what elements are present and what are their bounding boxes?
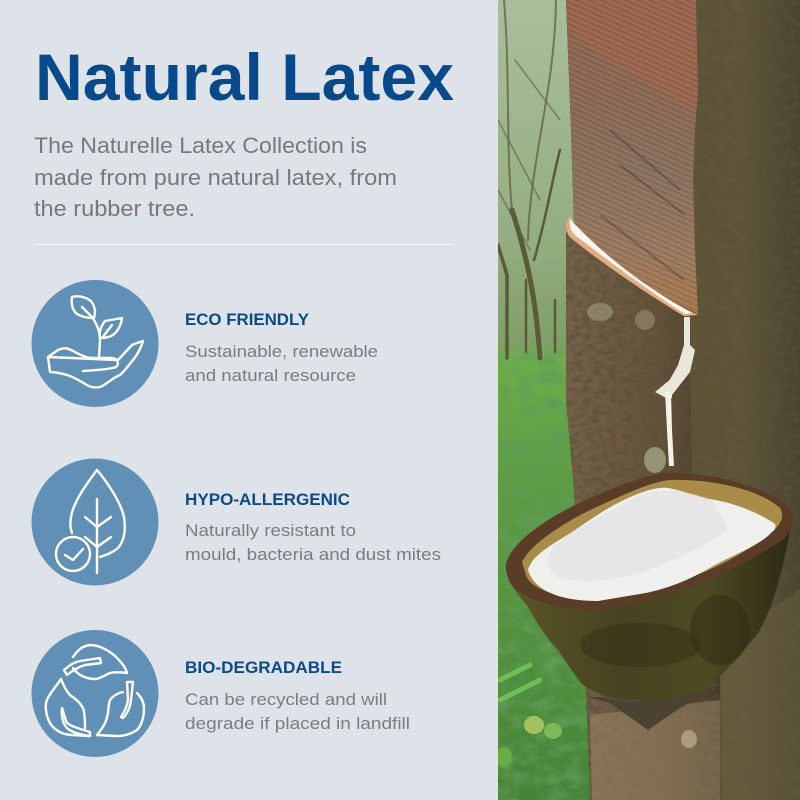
intro text — [34, 133, 397, 221]
description: and natural resource — [185, 366, 356, 385]
description — [185, 342, 378, 385]
heading: ECO FRIENDLY — [185, 310, 310, 329]
icon: leaf with check — [32, 458, 158, 586]
latex groove and drip — [566, 216, 698, 466]
feature: bio-degradable — [32, 630, 410, 757]
description: degrade if placed in landfill — [185, 714, 410, 733]
photo: rubber tree being tapped — [496, 0, 800, 800]
feature: eco friendly — [32, 280, 378, 407]
foreground foliage — [496, 665, 562, 767]
intro text: The Naturelle Latex Collection is — [34, 133, 367, 158]
feature: hypo-allergenic — [32, 458, 441, 586]
description: Can be recycled and will — [185, 690, 387, 709]
icon: plant in hand — [32, 280, 158, 407]
description — [185, 690, 410, 733]
collecting bowl — [506, 473, 793, 730]
intro text: made from pure natural latex, from — [34, 165, 397, 190]
description: Naturally resistant to — [185, 521, 356, 540]
description: Sustainable, renewable — [185, 342, 378, 361]
tapping panel — [566, 0, 700, 320]
icon: recycling leaves — [32, 630, 158, 757]
description — [185, 521, 441, 564]
heading: HYPO-ALLERGENIC — [185, 490, 350, 509]
tree trunk — [566, 0, 800, 800]
intro text: the rubber tree. — [34, 196, 195, 221]
forest background — [498, 0, 590, 800]
description: mould, bacteria and dust mites — [185, 545, 441, 564]
title: Natural Latex — [35, 40, 454, 114]
background panel — [0, 0, 498, 800]
heading: BIO-DEGRADABLE — [185, 658, 342, 677]
